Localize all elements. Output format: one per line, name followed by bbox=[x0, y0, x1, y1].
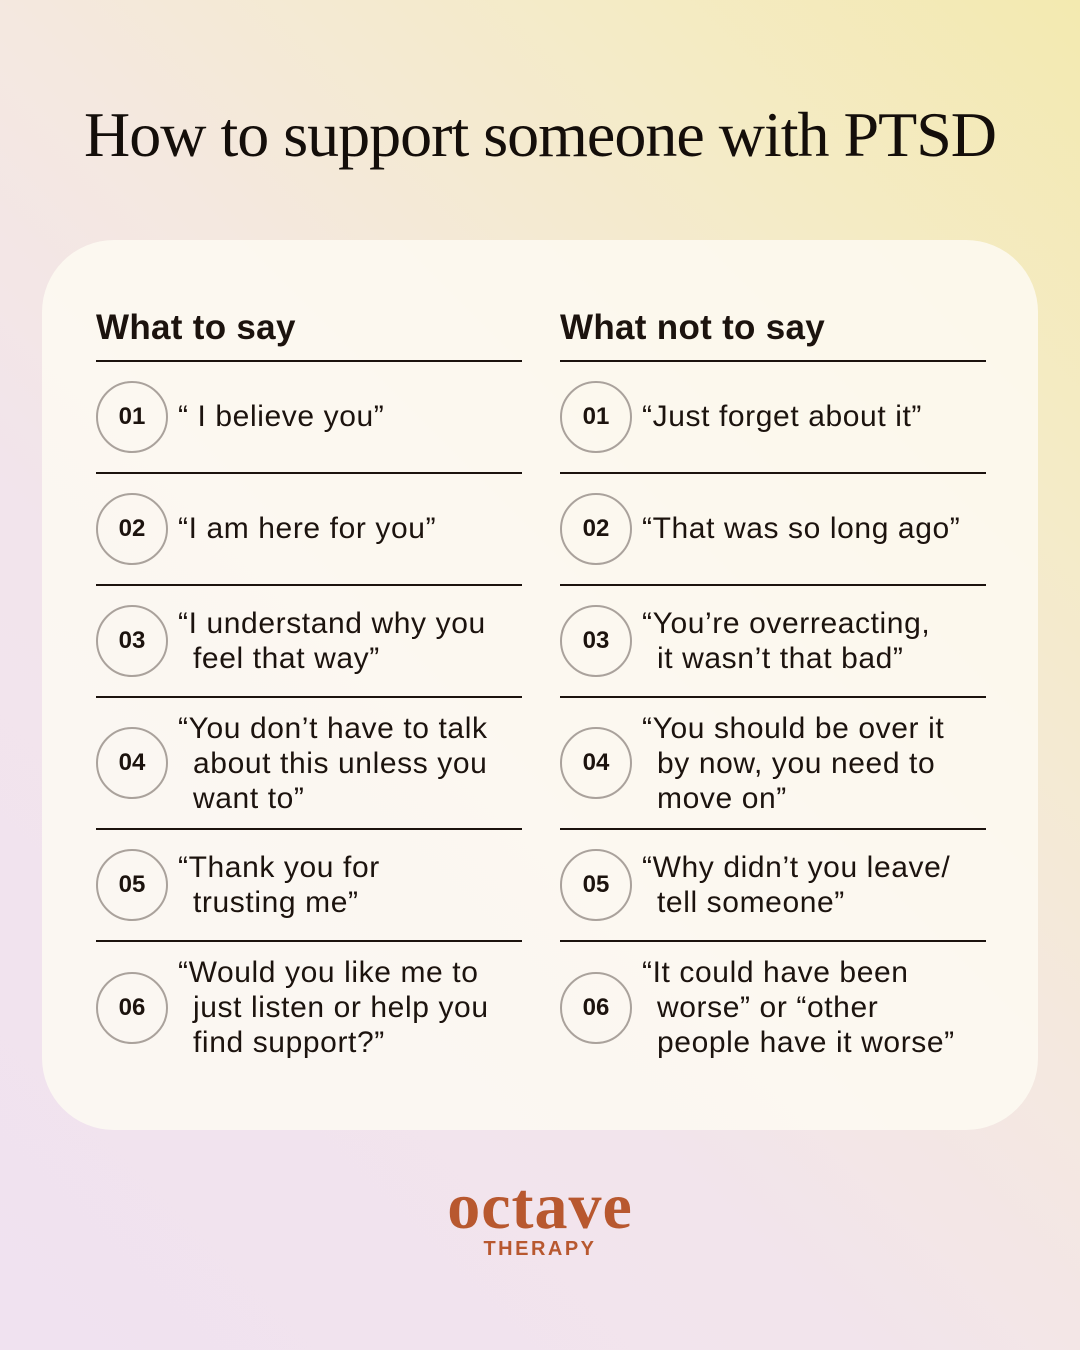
item 05 bbox=[96, 849, 380, 921]
item 04 bbox=[560, 712, 944, 815]
panel: card: people have it worse” bbox=[657, 1026, 955, 1059]
heading: What to say bbox=[96, 308, 296, 347]
item 06: “Would you like me to bbox=[178, 956, 479, 989]
title: How to support someone with PTSD bbox=[84, 99, 996, 170]
panel: card: by now, you need to bbox=[657, 747, 935, 780]
panel: card: “Thank you for bbox=[178, 851, 380, 884]
item 06 bbox=[560, 956, 955, 1059]
item 04 bbox=[96, 712, 488, 815]
panel: card: “You’re overreacting, bbox=[642, 607, 930, 640]
item 06: “It could have been bbox=[642, 956, 909, 989]
panel: card: “Why didn’t you leave/ bbox=[642, 851, 950, 884]
panel: card: “That was so long ago” bbox=[642, 512, 960, 545]
item 06 bbox=[96, 956, 489, 1059]
panel: card: 06 bbox=[119, 994, 145, 1021]
panel: card: “You don’t have to talk bbox=[178, 712, 488, 745]
panel: card: move on” bbox=[657, 782, 787, 815]
panel: card: 02 bbox=[119, 515, 145, 542]
panel: card: 01 bbox=[119, 403, 145, 430]
panel: what to say bbox=[96, 308, 522, 1059]
logo: octave bbox=[447, 1170, 633, 1243]
panel: card: 01 bbox=[583, 403, 609, 430]
item 03 bbox=[96, 605, 486, 677]
panel: card bbox=[42, 240, 1038, 1130]
item 05 bbox=[560, 849, 950, 921]
panel: card: 04 bbox=[583, 749, 609, 776]
heading: What not to say bbox=[560, 308, 825, 347]
panel: card: 03 bbox=[583, 627, 609, 654]
panel: card: “I understand why you bbox=[178, 607, 486, 640]
panel: card: “Just forget about it” bbox=[642, 400, 922, 433]
panel: card: 03 bbox=[119, 627, 145, 654]
panel: card: “You should be over it bbox=[642, 712, 944, 745]
panel: card: “ I believe you” bbox=[178, 400, 384, 433]
panel: card: 05 bbox=[119, 871, 145, 898]
panel: card: it wasn’t that bad” bbox=[657, 642, 904, 675]
panel: card: worse” or “other bbox=[657, 991, 878, 1024]
panel: card: want to” bbox=[193, 782, 305, 815]
logo: THERAPY bbox=[483, 1238, 597, 1260]
item 02 bbox=[560, 493, 960, 565]
panel: card: trusting me” bbox=[193, 886, 359, 919]
panel: what not to say bbox=[560, 308, 986, 1059]
item 02 bbox=[96, 493, 436, 565]
panel: card: 02 bbox=[583, 515, 609, 542]
item 01 bbox=[96, 381, 384, 453]
panel: card: about this unless you bbox=[193, 747, 487, 780]
panel: card: “I am here for you” bbox=[178, 512, 436, 545]
panel: card: 05 bbox=[583, 871, 609, 898]
panel: card: 04 bbox=[119, 749, 145, 776]
item 03 bbox=[560, 605, 930, 677]
panel: card: feel that way” bbox=[193, 642, 380, 675]
item 01 bbox=[560, 381, 922, 453]
panel: card: 06 bbox=[583, 994, 609, 1021]
panel: card: just listen or help you bbox=[193, 991, 489, 1024]
panel: card: tell someone” bbox=[657, 886, 845, 919]
panel: card: find support?” bbox=[193, 1026, 385, 1059]
